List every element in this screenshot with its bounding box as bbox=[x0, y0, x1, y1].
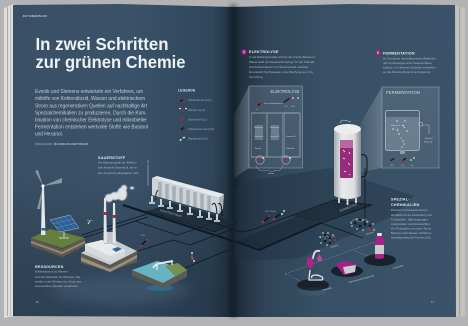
oxygen text: Als Nebenprodukt der Elektro- bbox=[98, 160, 137, 164]
inlet molecules: CO₂ bbox=[390, 165, 394, 167]
panel title: FERMENTATION bbox=[386, 90, 420, 95]
product: fuel pump bbox=[297, 251, 333, 295]
resources text bbox=[35, 265, 82, 288]
step 2 text: so die Alkohole Butanol und Hexanol. bbox=[383, 70, 431, 74]
legend item: water: Wasser (H₂O) bbox=[188, 108, 205, 112]
electrolysis cells: Kathode bbox=[286, 147, 295, 150]
inlet molecules: H₂ bbox=[411, 165, 414, 167]
specialty chemicals text: als Basis für die Herstellung von bbox=[391, 213, 433, 217]
electrolyser: ELEKTROLYSEUR bbox=[160, 208, 182, 218]
badge 2: 2 bbox=[377, 51, 379, 55]
oxygen text: die Umgebung abgegeben wird. bbox=[98, 171, 139, 175]
resources text: werden unter Einsatz von Strom aus bbox=[35, 280, 82, 284]
chimneys bbox=[104, 198, 116, 243]
bioreactor: Bakterien bbox=[391, 124, 401, 127]
panel: right page bbox=[234, 4, 456, 317]
oxygen outlet line bbox=[147, 156, 149, 186]
electrolysis cells bbox=[251, 113, 300, 157]
intro text bbox=[35, 89, 148, 138]
step 2 text: das Synthesegas unter Sauerstoffaus- bbox=[383, 61, 432, 65]
product: fuel pump: Treibstoffe bbox=[322, 286, 333, 292]
intro text: und Hexanol. bbox=[35, 132, 63, 138]
panel: left page bbox=[13, 4, 234, 317]
electrolysis cells: Kammer 3 bbox=[286, 135, 297, 138]
inlet molecules bbox=[389, 157, 415, 167]
icon: solar panel bbox=[50, 215, 79, 238]
panel title: ELEKTROLYSE bbox=[270, 89, 300, 94]
page number left: 16 bbox=[36, 300, 39, 304]
badge 1: 1 bbox=[243, 50, 245, 54]
bioreactor: H₂ bbox=[400, 138, 403, 140]
legend bbox=[178, 88, 214, 141]
electrolysis cells: Membran bbox=[254, 126, 264, 129]
oxygen text bbox=[98, 156, 139, 175]
butanol molecule bbox=[319, 232, 339, 249]
resources text: RESSOURCEN bbox=[35, 265, 64, 269]
intro text: Evonik und Siemens entwickeln ein Verfahren, um bbox=[35, 89, 143, 95]
hexanol molecule bbox=[350, 218, 375, 236]
bioreactor bbox=[386, 110, 420, 154]
electrolysis cells: Kammer 1 bbox=[254, 135, 265, 138]
intro text: bination von chemischer Elektrolyse und mikrobieller bbox=[35, 118, 147, 124]
step 2 text: Im Fermenter verstoffwechseln Bakterien bbox=[383, 56, 436, 60]
oxygen molecule near pipes bbox=[87, 219, 93, 224]
specialty chemicals text: Butanol nach diesem Verfahren bbox=[391, 231, 432, 235]
intro text: Spezialchemikalien zu produzieren. Durch die Kom- bbox=[35, 110, 147, 116]
step 1 text: Wasserstoff und Sauerstoff zerlegt. An der Kathode bbox=[249, 60, 315, 64]
specialty chemicals text: zungsmitteln und Kunststoffen. bbox=[391, 222, 431, 226]
electrolyser bbox=[149, 176, 224, 221]
molecules on right pipe: CO₂ CO H₂ bbox=[265, 211, 276, 213]
oxygen text: SAUERSTOFF bbox=[98, 156, 126, 160]
fermenter tank bbox=[334, 120, 367, 225]
legend item: carbon monoxide: Kohlenmonoxid (CO) bbox=[188, 127, 214, 131]
intake pipe bbox=[153, 261, 173, 268]
electrolysis cells: Membran bbox=[270, 126, 280, 129]
resources text: sind die Rohstoffe für Rheticus. Sie bbox=[35, 275, 80, 279]
spine shadow bbox=[230, 5, 237, 317]
step 2 text: FERMENTATION bbox=[383, 52, 415, 56]
hologram molecules: O₂ bbox=[256, 109, 259, 111]
page stack: left edge bbox=[4, 4, 14, 318]
product: bottle bbox=[364, 233, 405, 270]
electrolysis cells: Anode bbox=[255, 147, 262, 150]
section tag: AUF EINEN BLICK bbox=[22, 15, 47, 18]
island: power plant bbox=[81, 185, 137, 272]
dashed product connector bbox=[285, 240, 380, 285]
building bbox=[85, 240, 125, 262]
resources text: erneuerbaren Quellen verarbeitet. bbox=[35, 284, 79, 288]
product: food packet: Nahrungsergänzungsmittel bbox=[348, 274, 375, 284]
molecules on right pipe bbox=[262, 210, 285, 223]
specialty chemicals text: beseitigt etwa drei Tonnen CO₂ bbox=[391, 236, 431, 240]
specialty chemicals text: CHEMIKALIEN bbox=[391, 203, 419, 207]
specialty chemicals text: SPEZIAL- bbox=[391, 198, 410, 202]
hologram molecules: Sauerstoffmembran bbox=[264, 102, 284, 105]
island: wind and solar bbox=[31, 170, 85, 257]
resources text: Kohlendioxid und Wasser bbox=[35, 270, 68, 274]
intro text: Strom aus regenerativen Quellen auf nachhaltige Art bbox=[35, 104, 148, 110]
specialty chemicals text bbox=[391, 198, 433, 240]
electrolysis cells: Kammer 2 bbox=[270, 135, 281, 138]
specialty chemicals text: Butanol und Hexanol dienen bbox=[391, 208, 428, 212]
CO2 molecule icon bbox=[140, 235, 148, 247]
intro text: mithilfe von Kohlendioxid, Wasser und elektrischem bbox=[35, 96, 145, 102]
specialty chemicals text: Die Produktion von einer Tonne bbox=[391, 226, 432, 230]
inlet molecules: CO bbox=[401, 165, 405, 167]
step 1 text: ELEKTROLYSE bbox=[249, 50, 279, 54]
step 2 text bbox=[375, 50, 436, 74]
oxygen molecule near pipes: Strom bbox=[87, 219, 93, 222]
hologram molecules bbox=[256, 97, 299, 111]
outlet: Butanol bbox=[425, 137, 433, 140]
pipes: right network and platforms bbox=[234, 200, 372, 250]
page stack: right edge bbox=[455, 5, 465, 317]
icon: wind turbine bbox=[35, 170, 62, 235]
hologram molecules: H₂O bbox=[291, 106, 295, 108]
platform label: FERMENTER bbox=[339, 202, 358, 213]
specialty chemicals text: Treibstoffen, Nahrungsergän- bbox=[391, 218, 429, 222]
water molecule icon bbox=[191, 252, 195, 262]
light beam: electrolysis bbox=[234, 86, 249, 178]
butanol molecule: Butanol bbox=[330, 244, 339, 249]
step 1 text bbox=[241, 49, 315, 79]
outlet bbox=[419, 122, 433, 144]
page number right: 17 bbox=[431, 300, 435, 304]
step 1 text: Es entsteht Synthesegas, eine Mischung aus CO₂, bbox=[249, 70, 314, 74]
product: bottle: Kunststoffe bbox=[392, 264, 405, 270]
step 2 text: schluss. In mehreren Schritten entstehen bbox=[383, 66, 436, 70]
hexanol molecule: Hexanol bbox=[366, 232, 374, 236]
byline: INFOGRAFIK: MAXIMILIAN BERTINGER bbox=[35, 143, 88, 146]
pipes: left and centre network bbox=[82, 203, 240, 268]
step 1 text: In der Elektrolysezelle wird an der Anode Wasser in bbox=[249, 55, 315, 59]
legend item: carbon dioxide: Kohlendioxid (CO₂) bbox=[188, 98, 212, 102]
step 1 text: wird Kohlendioxid zu Kohlenmonoxid reduziert. bbox=[249, 65, 309, 69]
hologram panel: electrolysis bbox=[249, 86, 302, 175]
legend: LEGENDE bbox=[178, 88, 196, 92]
step 1 text: CO und H₂. bbox=[249, 75, 264, 79]
stands bbox=[152, 196, 217, 220]
legend item: oxygen: Sauerstoff (O₂) bbox=[188, 118, 207, 122]
hologram molecules: CO₂ bbox=[284, 106, 288, 108]
hologram panel: fermentation bbox=[382, 87, 439, 168]
light beam: fermentation bbox=[360, 87, 382, 172]
oxygen text: lyse entsteht Sauerstoff, der in bbox=[98, 166, 137, 170]
product: food packet bbox=[331, 261, 375, 284]
outlet: Hexanol bbox=[424, 142, 433, 144]
legend item: hydrogen: Wasserstoff (H₂) bbox=[188, 136, 208, 140]
smoke bbox=[105, 185, 134, 202]
title bbox=[36, 34, 186, 72]
intro text: Fermentation entstehen wertvolle Stoffe wie Butanol bbox=[35, 124, 148, 130]
bottom circuit: Strom bbox=[268, 172, 274, 175]
title: In zwei Schritten bbox=[36, 34, 168, 54]
island: water bbox=[132, 261, 187, 291]
CO2 molecule icon: CO₂ bbox=[141, 235, 145, 237]
decorative glow bbox=[50, 276, 190, 304]
floor shading bbox=[234, 168, 414, 262]
title: zur grünen Chemie bbox=[36, 52, 186, 72]
